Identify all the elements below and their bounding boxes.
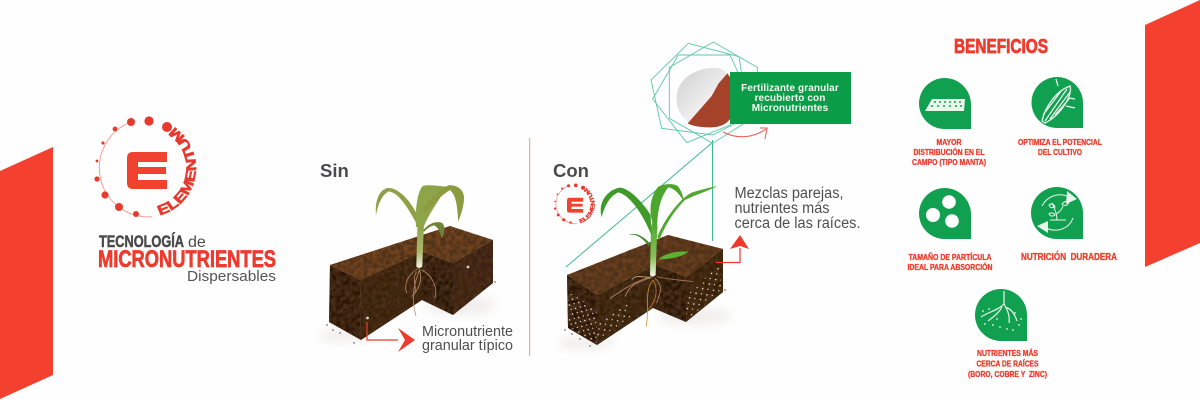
text: Micronutriente granular típico: [422, 324, 513, 354]
label: (BORO, COBRE Y ZINC): [968, 370, 1047, 379]
divider: [529, 138, 530, 356]
soil block with plant: Sin: [319, 185, 496, 344]
icon: granule blanket: [919, 78, 971, 129]
label: IDEAL PARA ABSORCIÓN: [908, 261, 993, 272]
arrow: Con callout: [716, 235, 749, 262]
benefit: optimiza el potencial: [1018, 77, 1102, 157]
label: DISTRIBUCIÓN EN EL: [914, 146, 984, 157]
text: Mezclas parejas: cerca de las raíces.: [734, 215, 860, 232]
text: Mezclas parejas: Mezclas parejas,: [734, 185, 844, 202]
icon: plant cycle: [1031, 187, 1083, 239]
small Elementum logo: [554, 184, 595, 224]
logo title: Tecnología de Micronutrientes Dispersables: Dispersables: [187, 268, 276, 285]
logo title: Tecnología de Micronutrientes Dispersables: MICRONUTRIENTES: [98, 247, 276, 273]
right red band: [1145, 0, 1200, 267]
heading: Con: Con: [553, 160, 589, 181]
logo: Elementum: ELEMENTUM: [156, 127, 196, 216]
label: NUTRICIÓN DURADERA: [1021, 250, 1117, 263]
icon: corn cob: [1032, 77, 1083, 128]
callout: fertilizante granular: [730, 72, 851, 124]
text: Mezclas parejas: [734, 185, 860, 232]
fertilizer granule: [677, 68, 735, 127]
label: CAMPO (TIPO MANTA): [912, 158, 986, 167]
logo title: Tecnología de Micronutrientes Dispersables: de: [188, 234, 206, 251]
callout: fertilizante granular: recubierto con: [755, 93, 825, 104]
label: [1018, 138, 1102, 157]
text: Mezclas parejas: nutrientes más: [734, 200, 830, 217]
logo: Elementum: [94, 116, 196, 218]
label: [912, 138, 986, 167]
label: [968, 348, 1047, 379]
benefit: nutrientes más cerca de raíces: [968, 289, 1047, 379]
label: TAMAÑO DE PARTÍCULA: [908, 252, 992, 262]
icon: three particles: [919, 188, 971, 239]
label: DEL CULTIVO: [1038, 148, 1083, 157]
arrow: Sin callout: [367, 322, 415, 352]
curved arrow: [723, 128, 767, 139]
benefit: mayor distribución: [912, 78, 986, 167]
green polygon outlines: [651, 42, 757, 143]
soil block with plant: Con: [557, 184, 731, 349]
text: Micronutriente granular típico: granular típico: [422, 338, 513, 354]
logo title: Tecnología de Micronutrientes Dispersables: TECNOLOGÍA: [99, 232, 184, 251]
logo title: Tecnología de Micronutrientes Dispersables: [98, 232, 276, 285]
benefit: nutrición duradera: [1021, 187, 1117, 263]
label: NUTRIENTES MÁS: [977, 348, 1038, 358]
label: CERCA DE RAÍCES: [976, 358, 1039, 368]
text: Micronutriente granular típico: Micronutriente: [422, 324, 513, 340]
benefit: tamaño de partícula: [908, 188, 993, 272]
green connector lines: [566, 140, 713, 267]
label: MAYOR: [936, 138, 962, 147]
left red band: [0, 147, 53, 399]
icon: roots with nutrients: [975, 289, 1027, 341]
heading: Beneficios: BENEFICIOS: [954, 36, 1048, 58]
label: [908, 252, 993, 272]
callout: fertilizante granular: Micronutrientes: [752, 103, 829, 114]
label: OPTIMIZA EL POTENCIAL: [1018, 138, 1102, 147]
callout: fertilizante granular: Fertilizante granular: [741, 83, 839, 94]
heading: Sin: Sin: [320, 160, 349, 181]
small Elementum logo: ELEMENTUM: [578, 188, 595, 224]
